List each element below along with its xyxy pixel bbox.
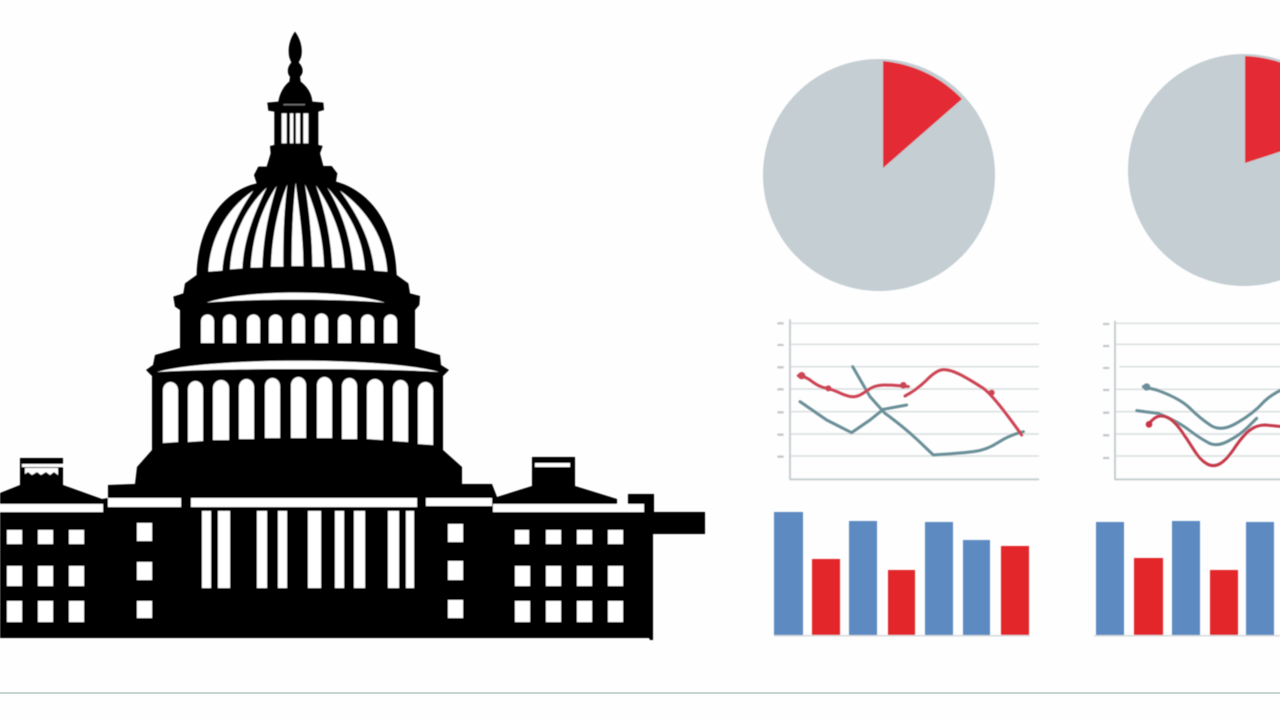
bar chart: left [774,512,1030,636]
bottom divider line [0,692,1280,694]
left wing windows [7,523,152,622]
right wing windows [448,524,623,622]
colonnade arched windows [157,361,439,445]
wing chimney details [22,463,570,475]
central portico columns [202,511,414,588]
pie chart: left [763,59,995,291]
line chart: right [1104,322,1280,479]
icon: capitol building silhouette [0,32,705,640]
white cornice bands [0,498,644,512]
capitol dome and lantern [173,32,420,353]
bar chart: right [1094,521,1280,636]
capitol main building body [0,340,705,640]
line chart: left [778,320,1038,479]
pie chart: right [1128,54,1280,286]
drum arched windows [201,314,397,343]
